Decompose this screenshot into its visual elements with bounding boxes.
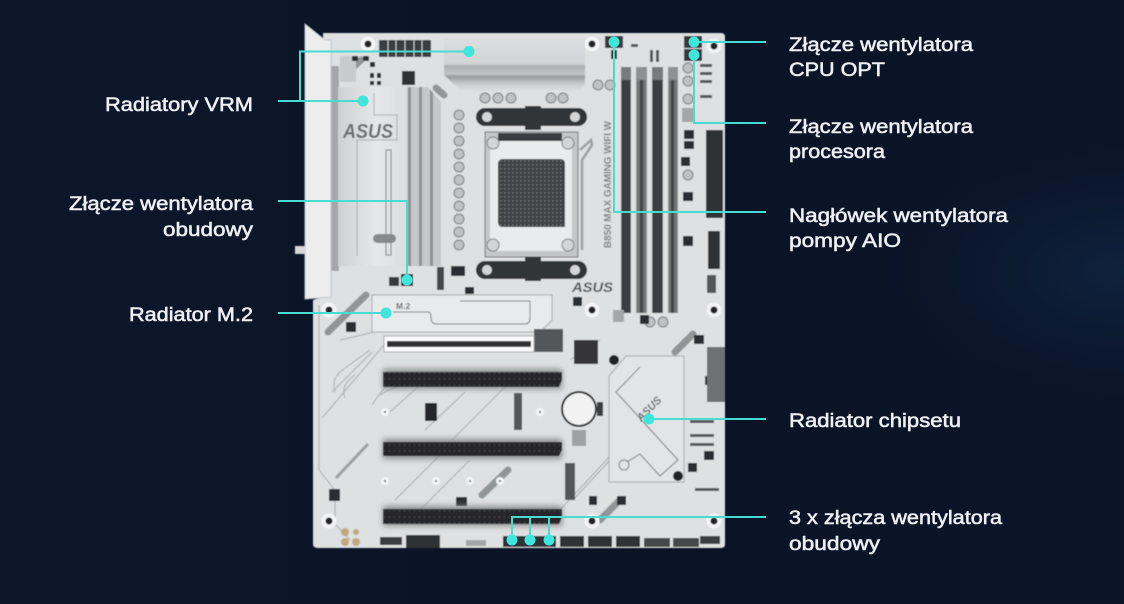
capacitors column [454, 63, 693, 327]
motherboard [295, 24, 725, 548]
chipset heatsink: ASUS [634, 394, 665, 425]
panel: board PCB [313, 33, 725, 548]
callout: Złącze wentylatora obudowy [69, 193, 412, 286]
SATA ports right edge [707, 347, 725, 402]
callout: Złącze wentylatora CPU OPT: Złącze wentylatora [789, 34, 973, 56]
front panel connector [708, 231, 720, 269]
warning icon [572, 430, 586, 446]
callout: Radiatory VRM [105, 46, 474, 116]
rear bottom connectors [341, 528, 720, 548]
standoff screws [382, 410, 542, 484]
callout: Radiatory VRM: Radiatory VRM [105, 94, 253, 116]
callout: Złącze wentylatora CPU OPT: CPU OPT [789, 59, 885, 81]
PCIe slot 4 [383, 509, 562, 524]
PCIe slot 3 [383, 442, 562, 456]
CPU retention bracket top [476, 106, 587, 130]
ATX 24-pin connector [706, 130, 723, 218]
callout: Nagłówek wentylatora pompy AIO: pompy AIO [789, 230, 901, 252]
callout: 3 x złącza wentylatora obudowy [506, 507, 1002, 555]
CMOS battery [561, 391, 603, 427]
callout: Nagłówek wentylatora pompy AIO [608, 36, 1008, 252]
callout: Radiator chipsetu: Radiator chipsetu [789, 410, 961, 432]
left grey strip beside I/O [331, 66, 339, 271]
callout: Złącze wentylatora procesora: Złącze wentylatora [789, 116, 973, 138]
VRM heatsink cover [338, 87, 407, 266]
ASUS logo lower: ASUS [571, 279, 614, 295]
callout: Złącze wentylatora CPU OPT [688, 34, 973, 81]
callout: Złącze wentylatora procesora [688, 50, 973, 163]
rear I/O port bump [295, 246, 305, 254]
callout: Złącze wentylatora procesora: procesora [789, 141, 885, 163]
callout: Radiator M.2: Radiator M.2 [129, 304, 253, 326]
board decorative slashes and traces [319, 60, 693, 540]
upper-left component area [340, 56, 415, 85]
callout: Złącze wentylatora obudowy: Złącze wentylatora [69, 193, 253, 215]
CPU pin grid [498, 159, 565, 227]
I/O shield [305, 24, 331, 299]
PCIe slot shadows [383, 369, 562, 526]
callout: Złącze wentylatora obudowy: obudowy [163, 219, 253, 241]
fan connector blocks [389, 36, 702, 286]
VRM heatsink left fins [405, 87, 441, 266]
main chip and connectors [425, 340, 598, 500]
CPU socket [485, 132, 592, 257]
PCIe x16 white slot [384, 329, 563, 352]
callout: 3 x złącza wentylatora obudowy: obudowy [789, 533, 880, 555]
mounting holes [324, 38, 720, 526]
RAM slots [621, 67, 678, 313]
8-pin power connector [379, 40, 431, 57]
VRM heatsink top [444, 38, 585, 92]
callout: Radiator chipsetu [644, 410, 961, 432]
callout: Nagłówek wentylatora pompy AIO: Nagłówek wentylatora [789, 205, 1008, 227]
small header and chips [329, 44, 719, 506]
board name: B850 MAX GAMING WIFI W [603, 120, 614, 248]
chipset heatsink [609, 355, 684, 482]
ASUS logo: ASUS [342, 121, 394, 143]
M.2 heatsink: M.2 [396, 301, 410, 311]
PCIe slot 2 [383, 372, 562, 387]
callout: Radiator M.2 [129, 304, 392, 326]
M.2 heatsink [372, 295, 552, 332]
CPU retention bracket bottom [476, 257, 587, 281]
callout: 3 x złącza wentylatora obudowy: 3 x złącza wentylatora [789, 507, 1002, 529]
